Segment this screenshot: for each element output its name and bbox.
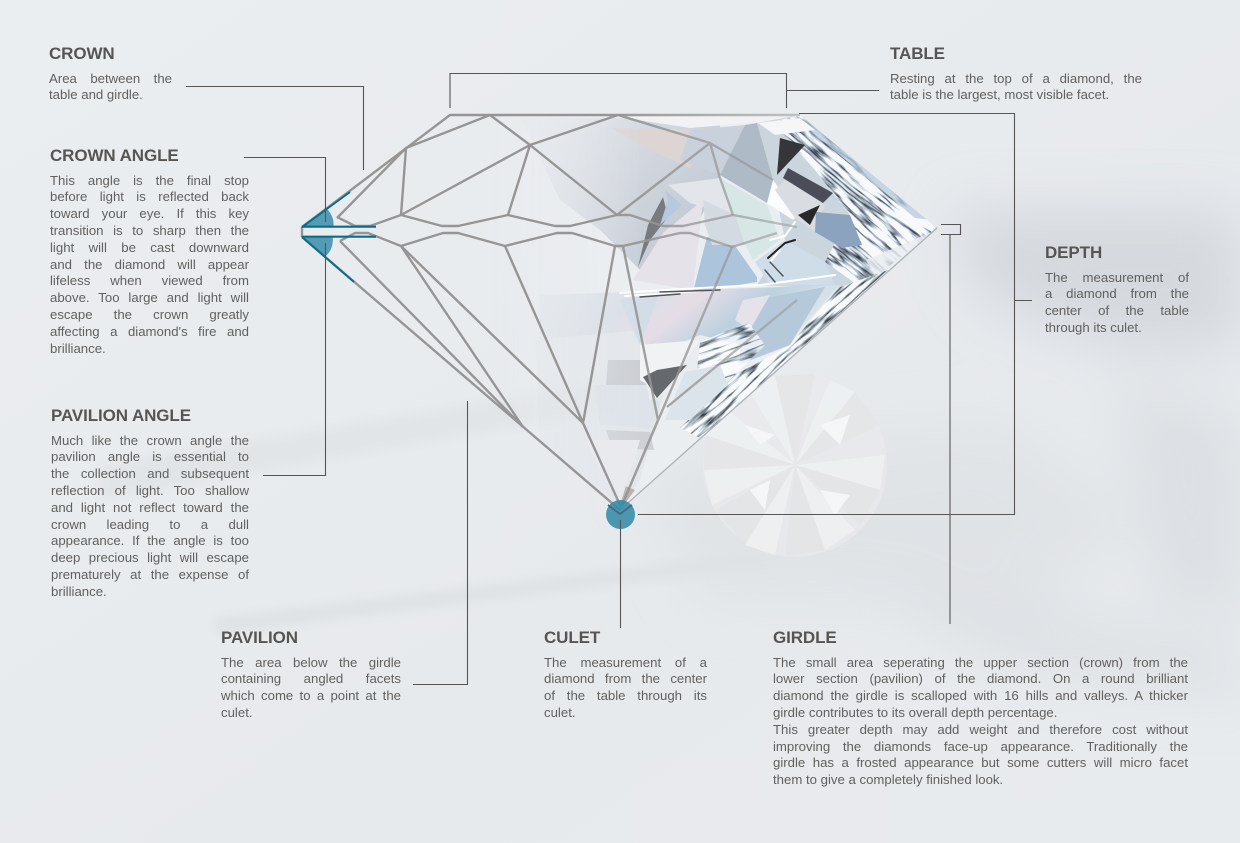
text: table: table is the largest, most visible facet. [890, 87, 1109, 102]
icon: crown angle marker [302, 192, 376, 227]
text: pavilion angle: the collection and subsequent [51, 466, 249, 481]
text: pavilion: The area below the girdle [221, 655, 401, 670]
text: pavilion angle: and light not reflect toward the [51, 500, 249, 515]
text: crown angle: escape the crown greatly [50, 307, 249, 322]
text: crown angle [50, 146, 249, 356]
leader: pavilion [413, 401, 468, 684]
right outline [620, 228, 937, 510]
text: crown angle: above. Too large and light will [50, 290, 249, 305]
text: culet [544, 628, 707, 720]
text: pavilion [221, 628, 401, 720]
text: depth [1045, 243, 1189, 335]
text: crown [49, 44, 172, 102]
leader: crown angle [244, 158, 326, 222]
text: girdle: improving the diamonds face-up appearance. Traditionally the [773, 739, 1188, 754]
text: depth: DEPTH [1045, 243, 1102, 262]
text: depth: center of the table [1045, 303, 1189, 318]
text: crown: table and girdle. [49, 87, 143, 102]
text: pavilion: PAVILION [221, 628, 298, 647]
text: pavilion: which come to a point at the [221, 688, 401, 703]
text: pavilion angle: crown leading to a dull [51, 517, 249, 532]
text: depth: a diamond from the [1045, 286, 1189, 301]
text: girdle: girdle contributes to its overall depth percentage. [773, 705, 1057, 720]
text: pavilion angle [51, 406, 249, 599]
text: crown angle: brilliance. [50, 341, 106, 356]
text: pavilion: culet. [221, 705, 253, 720]
leader: crown [186, 86, 364, 170]
text: pavilion angle: PAVILION ANGLE [51, 406, 191, 425]
icon: pavilion angle marker [302, 237, 376, 282]
text: girdle: them to give a completely finished look. [773, 772, 1003, 787]
text: crown angle: CROWN ANGLE [50, 146, 179, 165]
text: crown angle: affecting a diamond's fire and [50, 324, 249, 339]
text: pavilion angle: deep precious light will escape [51, 550, 249, 565]
text: pavilion angle: prematurely at the expense of [51, 567, 249, 582]
text: girdle: This greater depth may add weight and therefore cost without [773, 722, 1188, 737]
text: girdle: The small area seperating the upper section (crown) from the [773, 655, 1188, 670]
round diamond behind [703, 373, 887, 557]
text: crown: CROWN [49, 44, 115, 63]
diamond illustration [186, 73, 1032, 685]
leader: depth [638, 114, 1032, 514]
text: pavilion: containing angled facets [221, 671, 401, 686]
text: culet: CULET [544, 628, 600, 647]
text: culet: culet. [544, 705, 576, 720]
text: crown angle: This angle is the final stop [50, 173, 249, 188]
text: depth: The measurement of [1045, 270, 1189, 285]
text: crown angle: before light is reflected back [50, 189, 249, 204]
diamond photo [562, 116, 936, 508]
text: pavilion angle: reflection of light. Too shallow [51, 483, 249, 498]
text: pavilion angle: pavilion angle is essential to [51, 449, 249, 464]
text: crown angle: and the diamond will appear [50, 257, 249, 272]
leader: girdle [941, 224, 960, 624]
pavilion bands [540, 285, 840, 345]
crown right crinkled area [757, 116, 854, 289]
text: crown: Area between the [49, 71, 172, 86]
text: crown angle: toward your eye. If this key [50, 206, 249, 221]
text: table: Resting at the top of a diamond, the [890, 71, 1142, 86]
leader: pavilion angle [263, 243, 326, 476]
leader: culet [620, 520, 622, 628]
text: crown angle: lifeless when viewed from [50, 273, 249, 288]
icon: culet marker [606, 500, 635, 529]
text: girdle: GIRDLE [773, 628, 837, 647]
text: table [890, 44, 1142, 102]
text: pavilion angle: Much like the crown angle the [51, 433, 249, 448]
text: pavilion angle: brilliance. [51, 584, 107, 599]
text: girdle: girdle has a frosted appearance but some cutters will micro facet [773, 755, 1188, 770]
tweezers [100, 378, 770, 634]
text: depth: through its culet. [1045, 320, 1142, 335]
text: girdle [773, 628, 1188, 787]
pavilion right crinkled area [854, 275, 876, 286]
text: culet: The measurement of a [544, 655, 707, 670]
facet wireframe [302, 115, 800, 510]
leader: table [450, 74, 879, 108]
text: crown angle: transition is to sharp then the [50, 223, 249, 238]
text: crown angle: light will be cast downward [50, 240, 249, 255]
text: culet: diamond from the center [544, 671, 707, 686]
streaks [620, 222, 835, 297]
text: pavilion angle: appearance. If the angle is too [51, 533, 249, 548]
text: culet: of the table through its [544, 688, 707, 703]
text: table: TABLE [890, 44, 945, 63]
text: girdle: diamond the girdle is scalloped with 16 hills and valleys. A thicker [773, 688, 1188, 703]
text: girdle: lower section (pavilion) of the diamond. On a round brilliant [773, 671, 1188, 686]
